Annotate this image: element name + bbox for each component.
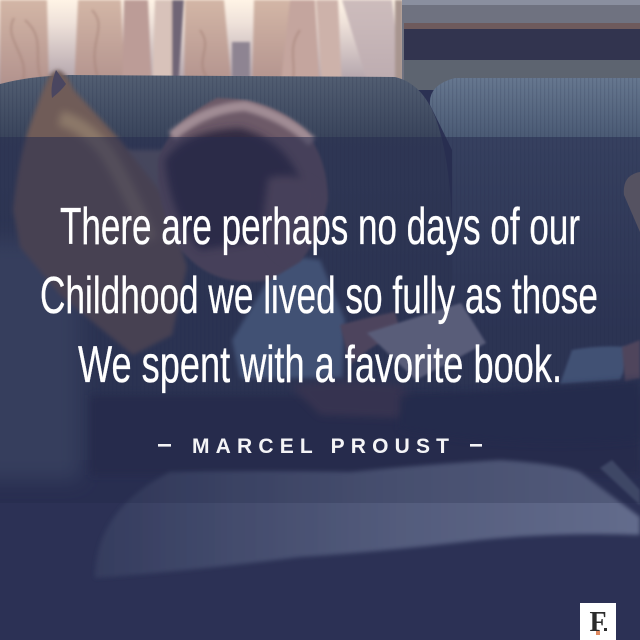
shirt [232, 255, 345, 378]
child [158, 98, 410, 418]
sofa back right cushion [430, 78, 640, 460]
window and wall [402, 0, 640, 90]
book [367, 303, 486, 380]
face [262, 176, 320, 262]
navy overlay, lower band [0, 503, 640, 640]
far right pillow [624, 172, 640, 232]
hands [340, 312, 400, 365]
sofa seat [95, 460, 640, 578]
curtains [0, 0, 403, 90]
logo badge [580, 603, 616, 640]
sofa back left cushion [0, 75, 452, 460]
attribution: MARCEL PROUST [192, 435, 449, 458]
hair highlights [172, 106, 312, 142]
sofa arm left [0, 240, 80, 480]
lower shadow [90, 395, 640, 475]
leg and sleeve [400, 340, 640, 443]
navy overlay, upper band [0, 137, 640, 503]
quote text [40, 198, 598, 394]
hair [158, 98, 328, 282]
logo badge: F [589, 607, 607, 638]
blanket behind pillow [125, 150, 200, 260]
pillow [13, 70, 187, 355]
